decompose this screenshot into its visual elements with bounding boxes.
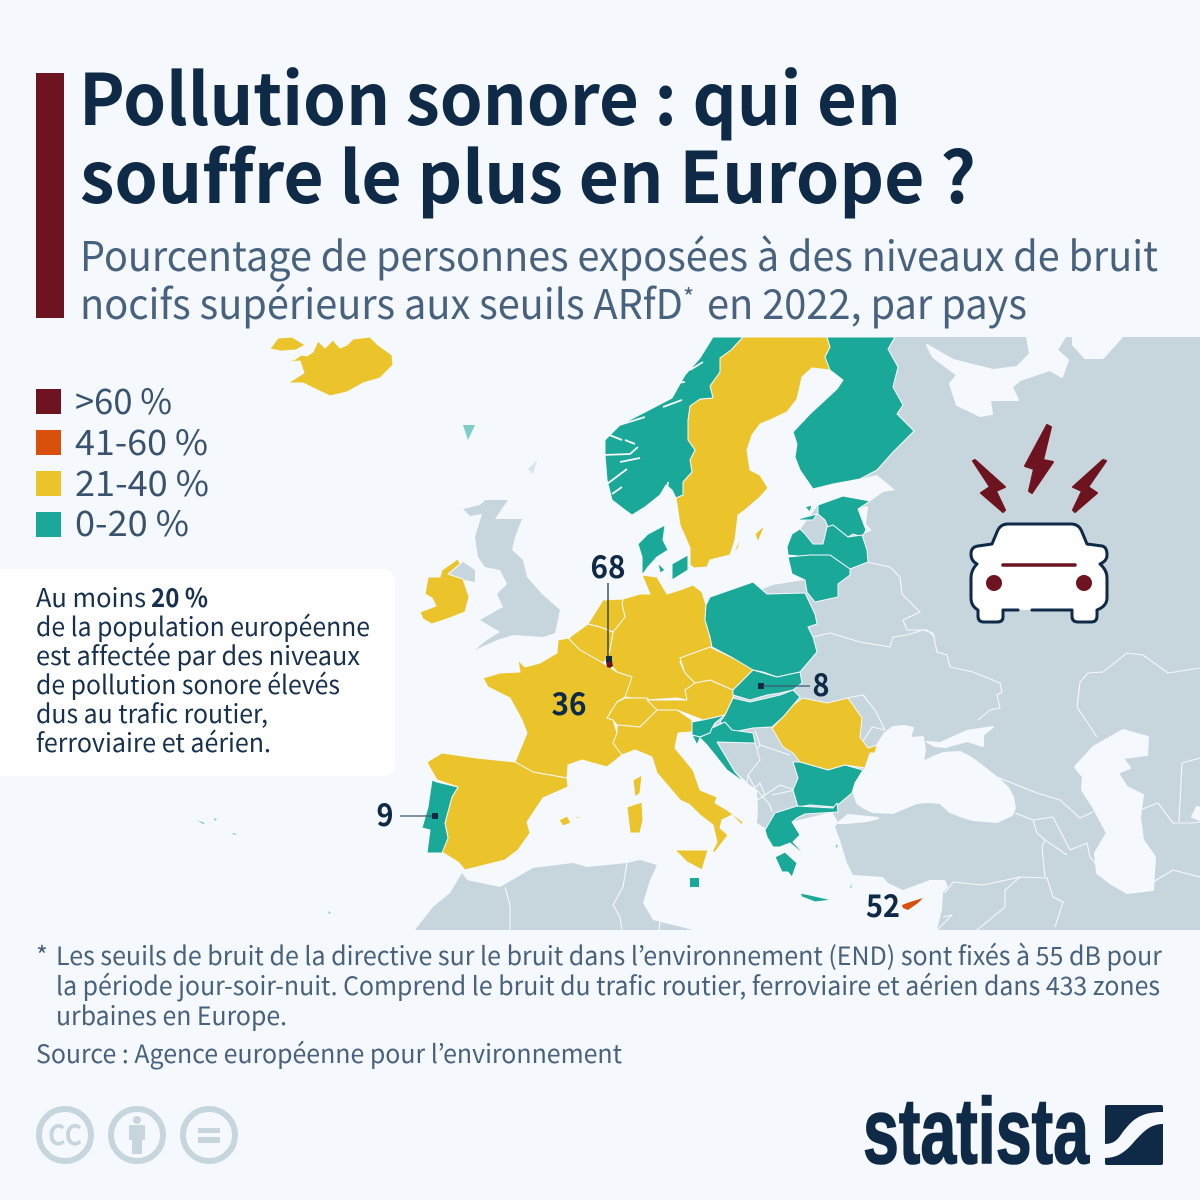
Slovenia [692,715,725,737]
Sweden [676,337,831,568]
footnote: la période jour-soir-nuit. Comprend le bruit du trafic routier, ferroviaire et aérien dans 433 zones [56,966,1160,1003]
countries 21-40 % [270,337,877,870]
icon: creative commons badges [39,1109,235,1161]
seas and lakes [838,337,1200,893]
value label: Cyprus 52: 52 [866,881,900,926]
Estonia [798,496,870,537]
title: Pollution sonore : qui en [79,44,901,146]
subtitle: * [683,278,694,313]
Ireland [420,559,469,624]
land: non-highlighted countries [415,337,1200,930]
value label: Portugal 9: 9 [376,790,394,835]
legend item: >60 %: >60 % [75,374,172,425]
Luxembourg >60 % [606,661,613,668]
logo: statista: statista [863,1079,1090,1183]
subtitle: en 2022, par pays [707,271,1027,331]
Bulgaria [793,762,863,807]
footnote: Les seuils de bruit de la directive sur le bruit dans l’environnement (END) sont fixés à 55 dB pour [56,936,1162,973]
footnote [36,936,1162,1033]
Portugal [422,780,458,853]
icon: car details [986,565,1092,591]
icon: CC: CC [48,1114,82,1154]
legend item: 0-20 %: 0-20 % [75,496,189,547]
subtitle: Pourcentage de personnes exposées à des niveaux de bruit [80,223,1158,283]
France [483,638,632,778]
Germany [606,575,712,700]
source: Source : Agence européenne pour l’environnement [36,1034,622,1071]
Netherlands [588,599,625,632]
Slovakia [733,670,802,700]
countries 0-20 % [197,337,914,914]
Malta marker [690,878,699,887]
callout: 20 % [151,578,208,615]
callout: est affectée par des niveaux [36,636,360,673]
Poland [705,582,817,677]
icon: car with noise bolts [971,425,1107,622]
legend [36,374,209,547]
Aegean and Atlantic islands [197,425,852,914]
subtitle [80,223,1158,331]
Denmark [638,525,688,580]
value label: Luxembourg 68 [590,542,626,662]
Cyprus 41-60 % [902,898,923,910]
footnote: urbaines en Europe. [56,996,287,1033]
Romania [772,698,877,770]
subtitle: nocifs supérieurs aux seuils ARfD [80,271,683,331]
Corsica [634,776,642,796]
Iceland [270,337,393,396]
borders of non-highlighted countries [505,562,1200,930]
Crete [801,894,829,902]
icon: CC [39,1109,91,1161]
callout [0,569,395,776]
value label: Hungary 8 [758,660,830,705]
Croatia [692,722,755,783]
icon: attribution [111,1109,163,1161]
accent bar [36,73,64,318]
Belgium [568,624,613,663]
callout: Au moins [36,578,146,615]
title [79,44,976,224]
icon: car body [971,524,1107,622]
value label: Portugal 9 [376,790,438,835]
map of Europe [197,337,1200,930]
Hungary [720,690,800,732]
Finland [793,337,914,489]
Sicily [675,850,708,870]
Austria [647,680,733,720]
Norwegian fjords [603,362,703,497]
Czechia [680,647,753,690]
Gotland and Oland [735,527,764,550]
callout: dus au trafic routier, [36,694,268,731]
value label: Luxembourg 68: 68 [590,542,626,587]
Spain [427,753,568,870]
callout: de la population européenne [36,607,370,644]
Switzerland [607,698,657,727]
Sardinia [627,802,643,833]
Greece [765,803,838,877]
Norway [605,337,743,515]
legend item: 21-40 %: 21-40 % [75,456,209,507]
callout: ferroviaire et aérien. [36,723,271,760]
title: souffre le plus en Europe ? [80,122,976,224]
callout: de pollution sonore élevés [36,665,340,702]
Balearic Islands [560,816,579,826]
legend item: 41-60 %: 41-60 % [75,415,208,466]
Italy [613,710,743,852]
Lithuania [788,555,850,602]
icon: noise bolts [973,425,1106,512]
value label: Hungary 8: 8 [812,660,830,705]
footnote: * [36,936,48,973]
Latvia [787,525,868,569]
icon: no derivatives [183,1109,235,1161]
value label: France 36: 36 [552,679,586,724]
